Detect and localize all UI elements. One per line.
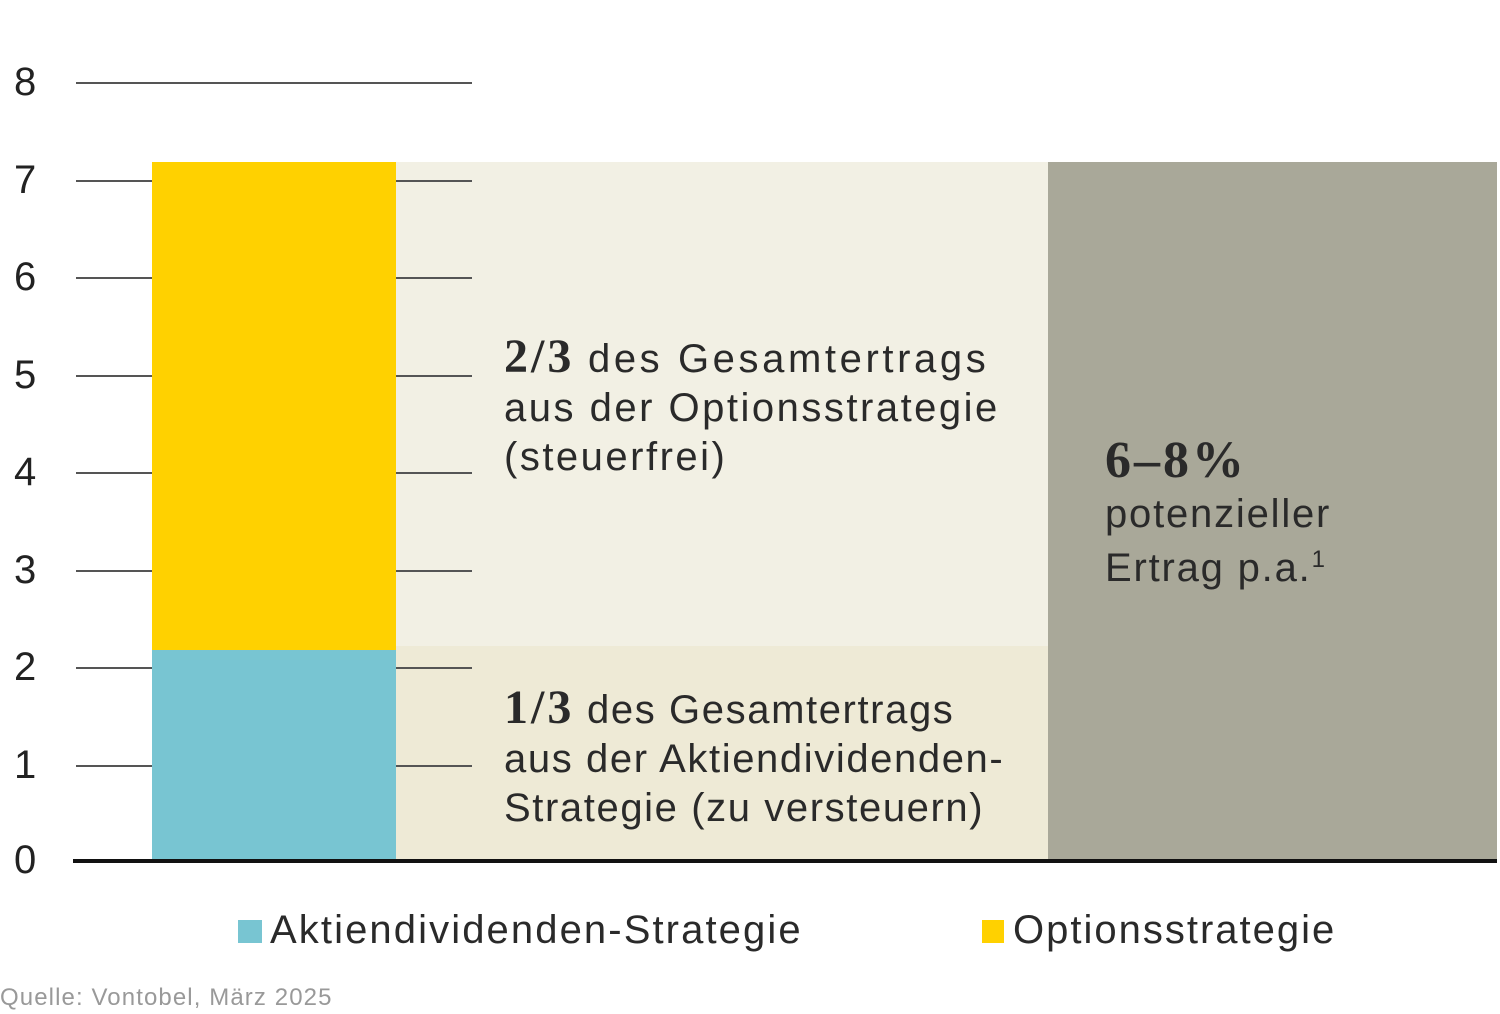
text: dividend share (504, 681, 1004, 830)
baseline (73, 859, 1497, 863)
panel: light upper (396, 162, 1048, 646)
y axis labels: 2 (14, 645, 36, 689)
legend item: dividends (238, 920, 262, 943)
text: options share: aus der Optionsstrategie (504, 386, 1000, 430)
text: total return (1105, 432, 1331, 590)
bar: stacked (152, 162, 396, 859)
y axis labels: 5 (14, 353, 36, 397)
y axis labels: 0 (14, 838, 36, 882)
text: dividend share: Strategie (zu versteuern) (504, 786, 984, 830)
legend: Optionsstrategie (1013, 908, 1336, 952)
text: total return: 6–8% (1105, 432, 1247, 489)
y axis labels (14, 60, 36, 882)
panel: light lower (396, 646, 1048, 860)
text: options share (504, 330, 1000, 479)
bar segment: dividends (152, 650, 396, 860)
text: options share: (steuerfrei) (504, 435, 727, 479)
text: dividend share: 1/3 des Gesamtertrags (504, 681, 954, 734)
text: total return: Ertrag p.a.1 (1105, 546, 1327, 590)
text: total return: potenzieller (1105, 492, 1331, 536)
y axis labels: 7 (14, 158, 36, 202)
y axis labels: 4 (14, 450, 36, 494)
legend item: options (982, 920, 1004, 943)
legend (238, 908, 1336, 952)
legend: Aktiendividenden-Strategie (270, 908, 803, 952)
panel: total return (1048, 162, 1497, 860)
y axis labels: 3 (14, 548, 36, 592)
bar segment: options (152, 162, 396, 650)
text: dividend share: aus der Aktiendividenden- (504, 737, 1004, 781)
source: Quelle: Vontobel, März 2025 (0, 984, 333, 1011)
text: options share: 2/3 des Gesamtertrags (504, 330, 989, 383)
y axis labels: 1 (14, 743, 36, 787)
y axis labels: 6 (14, 255, 36, 299)
y axis labels: 8 (14, 60, 36, 104)
